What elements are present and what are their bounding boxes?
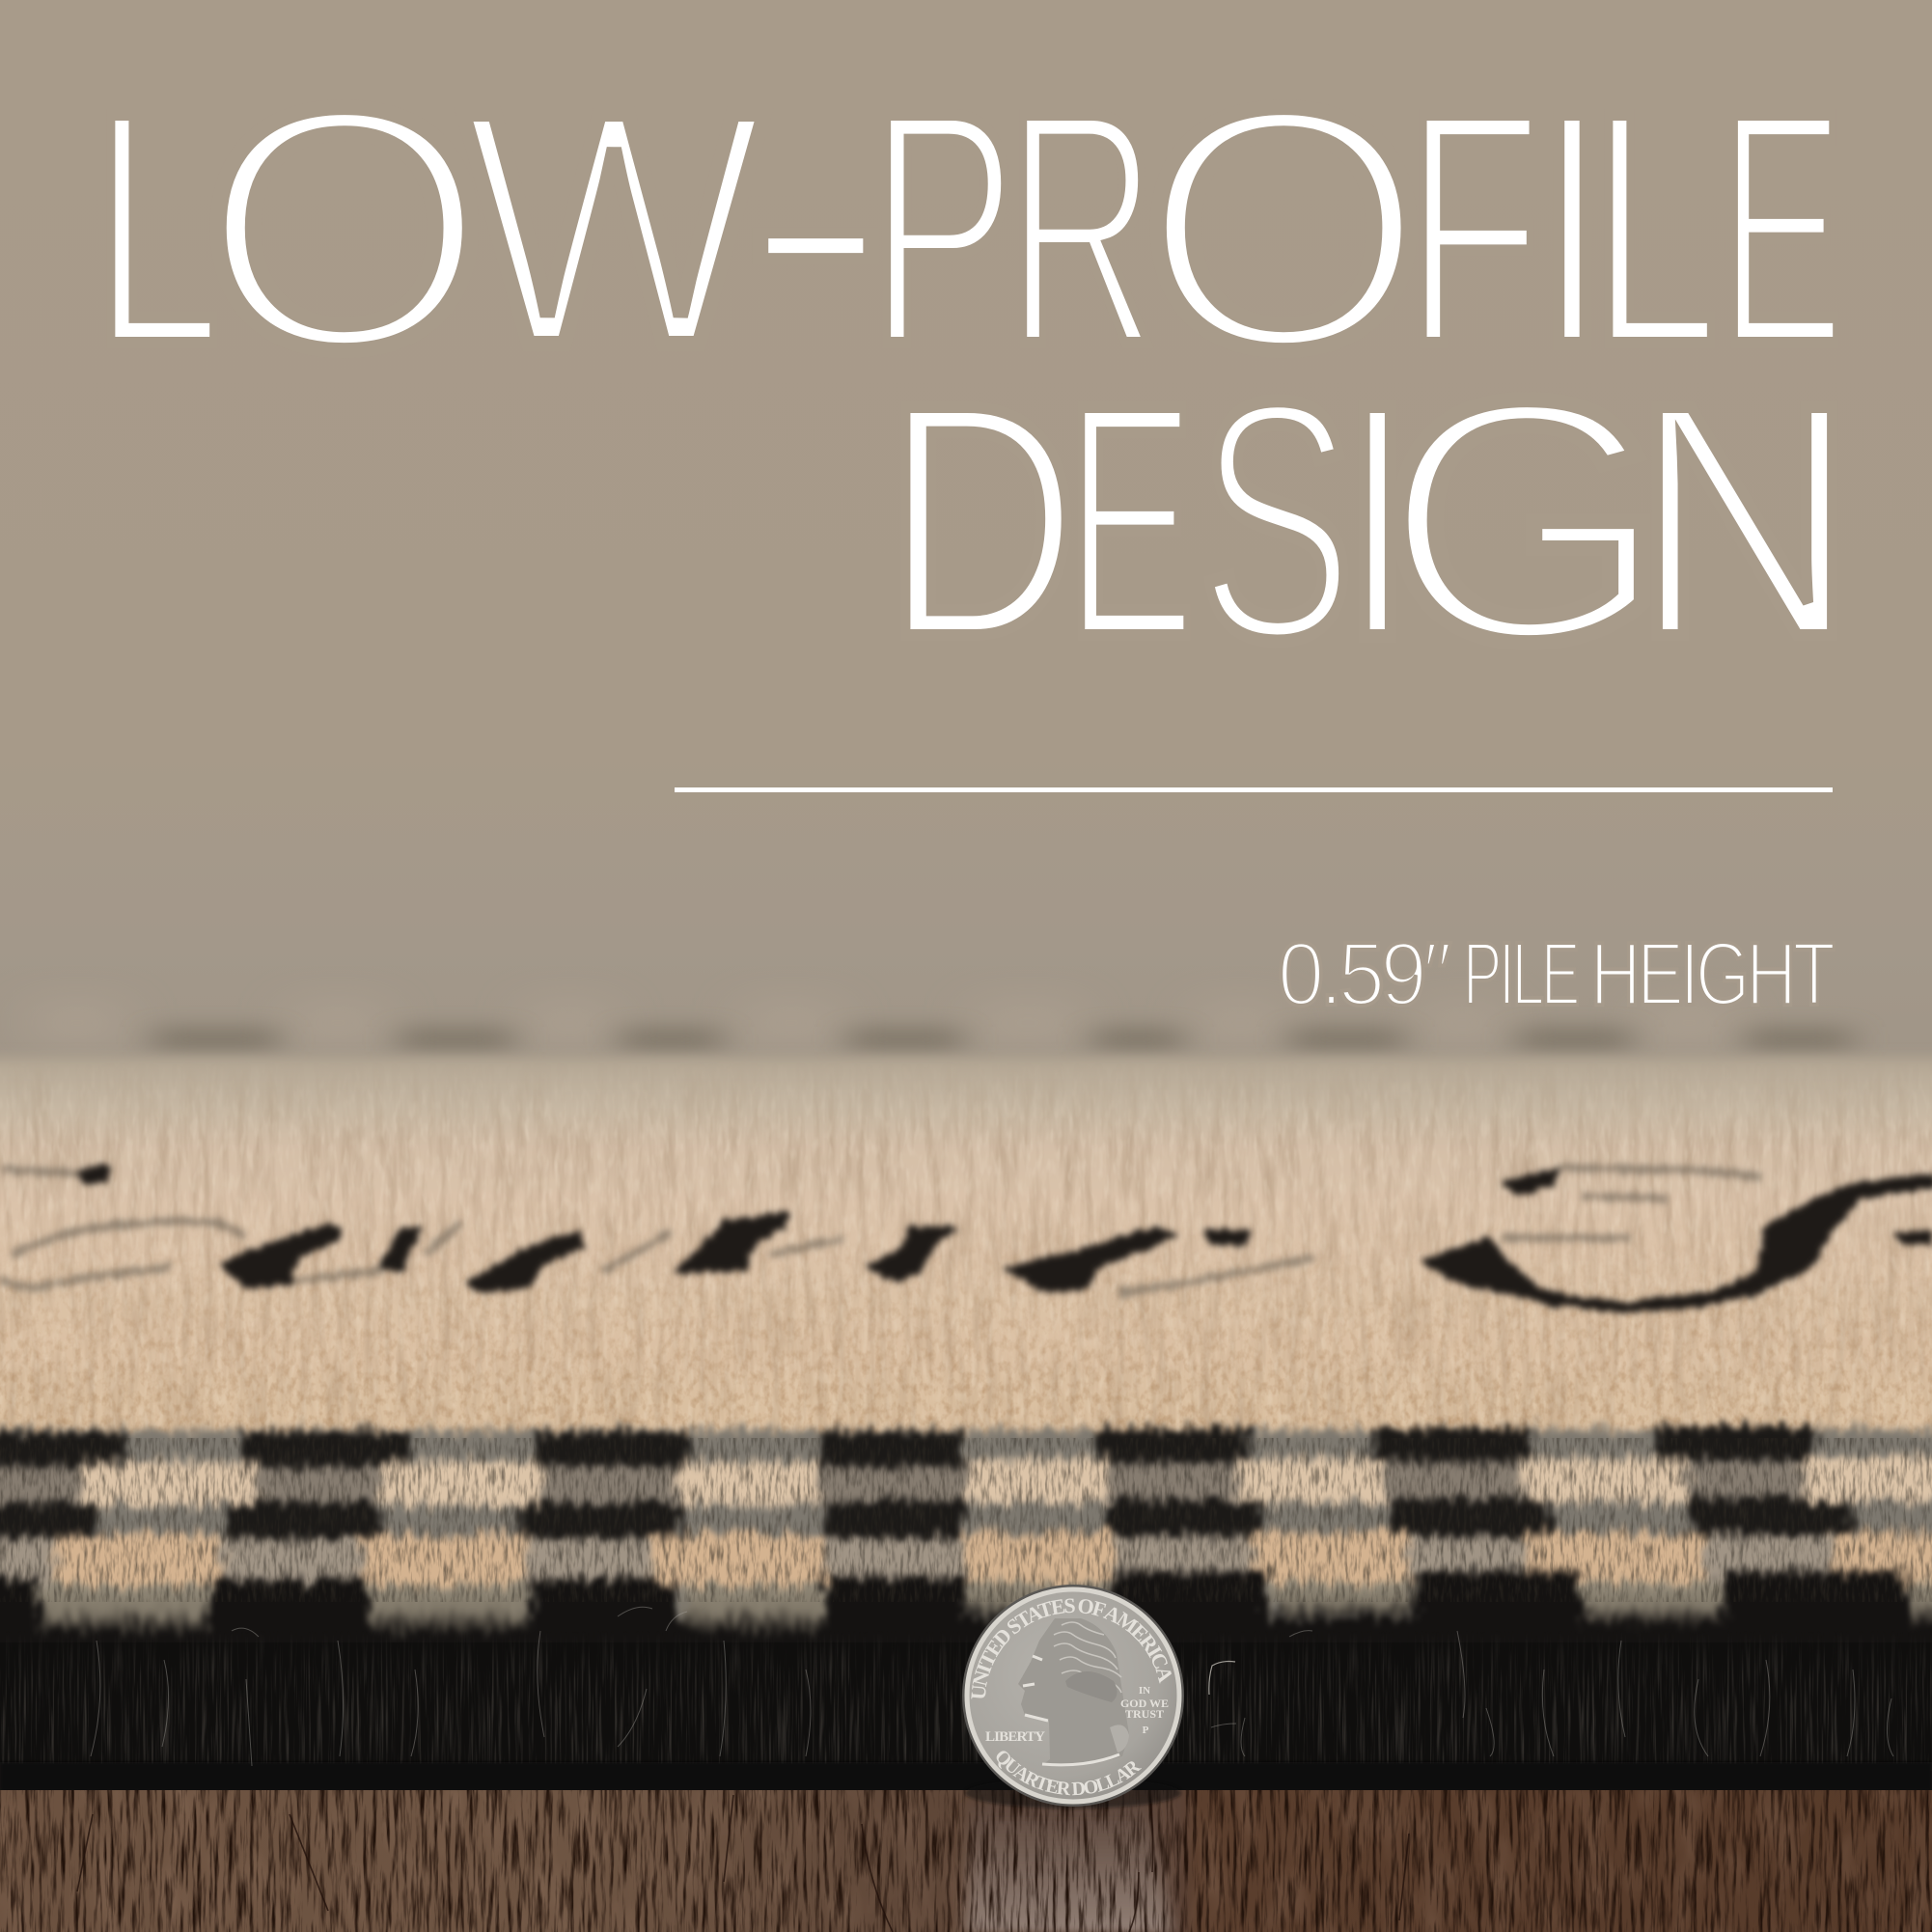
- title line 2: G: [1382, 330, 1670, 713]
- title line 1: L: [92, 42, 221, 413]
- coin portrait: [1018, 1618, 1129, 1766]
- coin inscriptions: GOD WE: [1120, 1697, 1169, 1710]
- wood floor: [0, 1790, 1932, 1932]
- coin inscriptions: LIBERTY: [985, 1729, 1045, 1745]
- divider rule: [675, 787, 1833, 792]
- title line 2: E: [1065, 335, 1195, 705]
- title line 2: N: [1632, 335, 1858, 705]
- text: pile height spec: 0.59″: [1278, 924, 1451, 1024]
- coin inscriptions: P: [1143, 1725, 1149, 1736]
- gingham border band: [0, 1426, 1932, 1662]
- coin inscriptions: QUARTER DOLLAR: [996, 1751, 1142, 1795]
- black pile edge of the mat: [0, 1607, 1932, 1793]
- text: pile height spec: PILE: [1463, 924, 1578, 1024]
- title: low-profile design: [92, 33, 1858, 713]
- title line 2: S: [1199, 330, 1354, 710]
- title line 1: R: [1007, 42, 1157, 413]
- icon: US quarter dollar coin: [962, 1585, 1184, 1807]
- title line 2: I: [1339, 335, 1417, 707]
- title line 1: I: [1532, 42, 1612, 415]
- title line 1: O: [1141, 38, 1426, 421]
- title line 1: O: [201, 38, 488, 421]
- blurred far edge of the mat: [29, 1004, 1851, 1052]
- coin inscriptions: IN: [1139, 1685, 1150, 1697]
- beige coir mat surface: [0, 1057, 1932, 1448]
- coin inscriptions: TRUST: [1125, 1707, 1164, 1721]
- title line 2: D: [884, 335, 1079, 705]
- panel: photograph of mat on wood floor: [0, 1004, 1932, 1932]
- title line 1: P: [869, 42, 1016, 413]
- title line 1: F: [1404, 42, 1542, 413]
- coin inscriptions: UNITED STATES OF AMERICA: [971, 1598, 1172, 1698]
- coin inscriptions: [971, 1598, 1172, 1795]
- panel: tan studio backdrop: [0, 0, 1932, 1071]
- title line 1: -: [740, 33, 891, 405]
- mat script pattern, out of focus: [0, 1167, 1932, 1311]
- title line 1: W: [462, 42, 768, 415]
- soft contact shadow under coin: [965, 1778, 1181, 1808]
- text: pile height spec: HEIGHT: [1590, 924, 1834, 1024]
- title line 1: L: [1590, 42, 1719, 413]
